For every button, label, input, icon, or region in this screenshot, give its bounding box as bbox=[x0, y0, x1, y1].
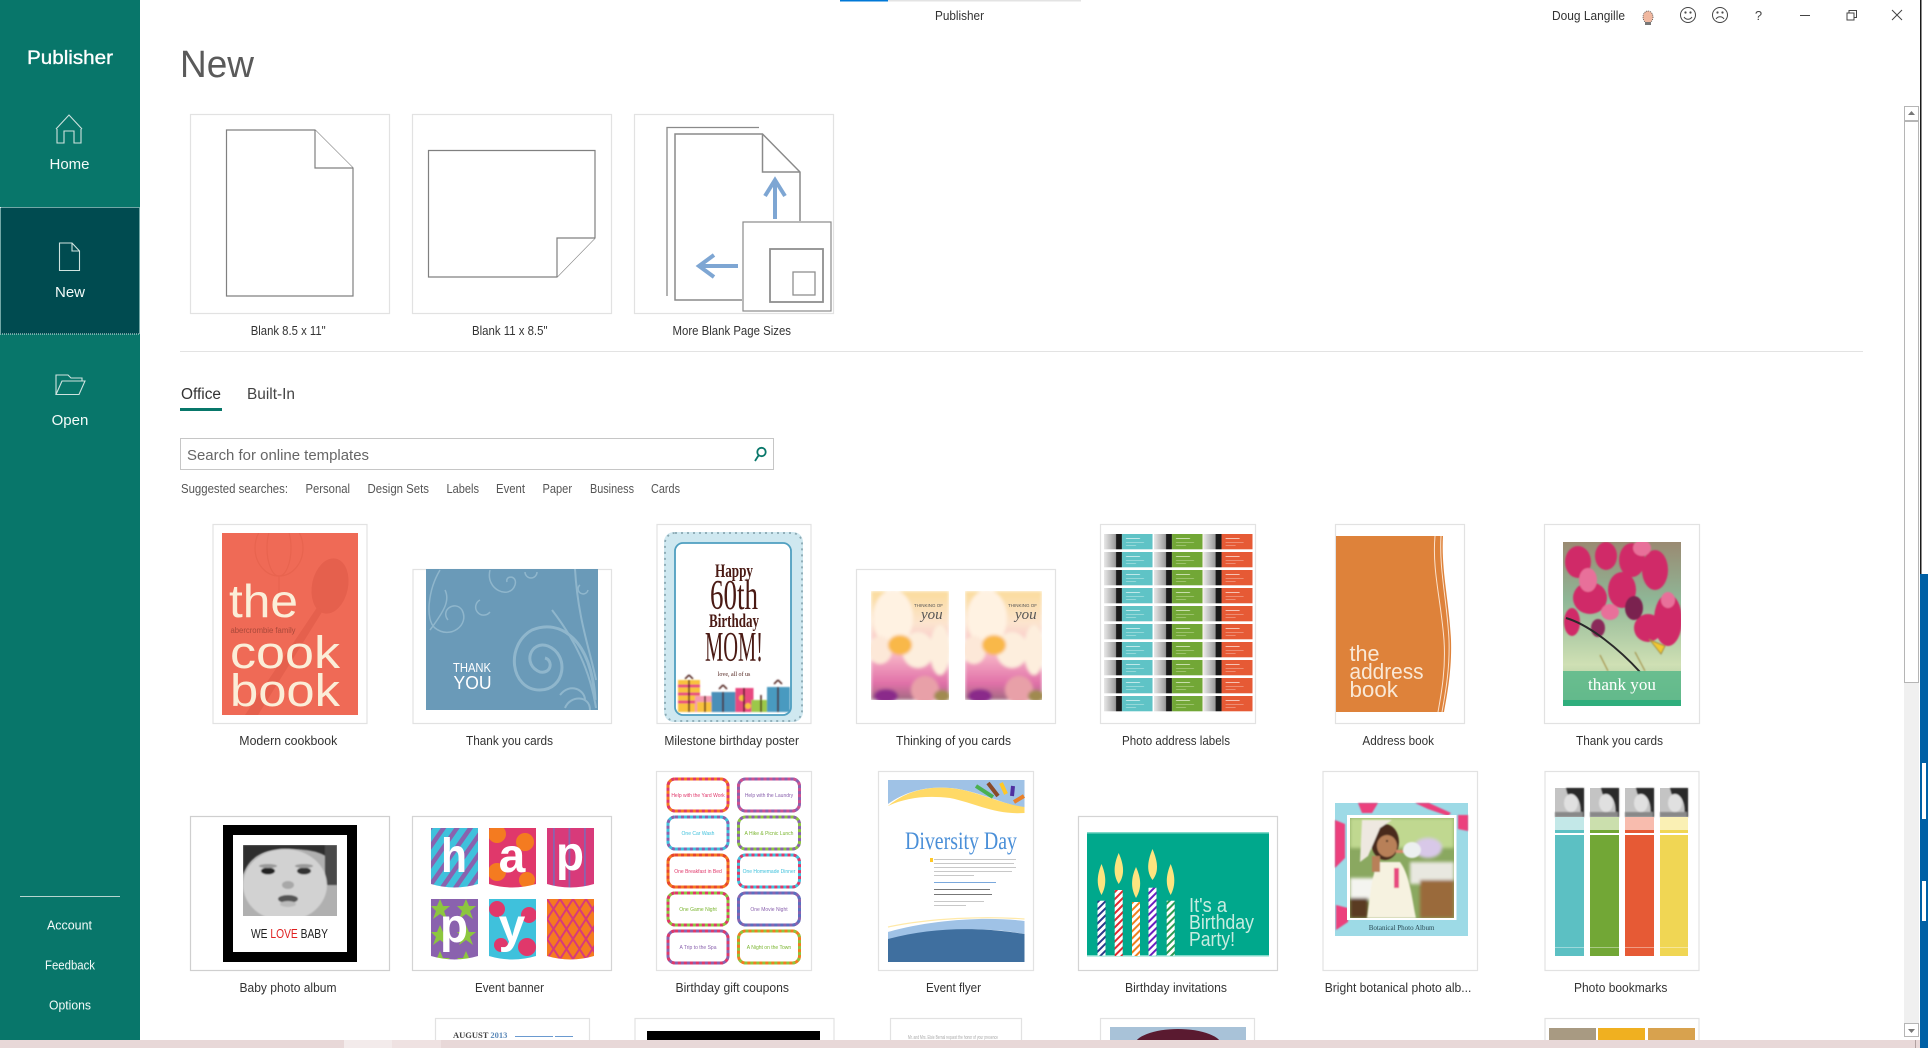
template: Milestone birthday poster bbox=[657, 524, 811, 748]
template: Address book: book bbox=[1350, 677, 1399, 702]
suggested searches: Paper bbox=[542, 482, 572, 496]
template: Modern cookbook: book bbox=[230, 665, 341, 716]
template: Photo address labels: Photo address labels bbox=[1122, 734, 1230, 748]
template: Birthday gift coupons: A Trip to the Spa bbox=[680, 945, 717, 951]
template: Thinking of you cards: you bbox=[919, 607, 943, 623]
suggested searches: Suggested searches: bbox=[181, 482, 288, 496]
suggested searches: Event bbox=[496, 482, 525, 496]
panel: more blank page sizes bbox=[634, 114, 834, 338]
template: Modern cookbook: abercrombie family bbox=[230, 626, 296, 635]
template: Modern cookbook: the bbox=[229, 575, 298, 627]
template: Thank you cards: YOU bbox=[454, 673, 492, 693]
template: Event flyer bbox=[878, 772, 1034, 995]
template: Bright botanical photo album bbox=[1323, 772, 1478, 995]
template: Birthday gift coupons: One Movie Night bbox=[750, 907, 788, 913]
template: Milestone birthday poster: love, all of us bbox=[718, 671, 751, 678]
right screen edge bbox=[1920, 0, 1928, 1048]
template: Thank you cards floral bbox=[1544, 524, 1700, 748]
panel: blank template Blank 11 x 8.5 bbox=[412, 114, 612, 338]
template: Birthday invitations: It's a bbox=[1189, 895, 1228, 917]
template: Birthday gift coupons: One Car Wash bbox=[682, 831, 715, 837]
template: Birthday gift coupons: One Game Night bbox=[679, 907, 717, 913]
template: Milestone birthday poster: 60th bbox=[710, 573, 758, 619]
template: Birthday invitations: Birthday bbox=[1189, 912, 1254, 934]
template: Birthday gift coupons: One Breakfast in Bed bbox=[674, 869, 722, 875]
icon: arrow up bbox=[765, 180, 785, 219]
suggested searches: Personal bbox=[306, 482, 350, 496]
template: Birthday gift coupons: Birthday gift coupons bbox=[676, 981, 789, 995]
template: Milestone birthday poster: MOM! bbox=[705, 625, 763, 671]
nav item: New selected: New bbox=[55, 284, 85, 301]
tab: Office bbox=[180, 386, 222, 411]
icon: smile bbox=[1680, 8, 1696, 22]
tab: Office: Office bbox=[181, 386, 221, 403]
template: Birthday gift coupons bbox=[656, 772, 812, 995]
template: Event banner: p bbox=[440, 900, 468, 953]
template: Birthday gift coupons: One Homemade Dinner bbox=[743, 869, 796, 875]
panel: blank template Blank 8.5 x 11 bbox=[190, 114, 390, 338]
user name: Doug Langille bbox=[1552, 9, 1625, 23]
template: Baby photo album bbox=[190, 816, 390, 995]
panel: sidebar navigation bbox=[0, 0, 140, 1040]
partial templates: third row: Mr. and Mrs. Elsie Bernal request the honor of your presence bbox=[908, 1035, 998, 1041]
template: Event banner: h bbox=[441, 830, 467, 883]
nav item: Home bbox=[49, 115, 90, 173]
template: Thank you cards floral: Thank you cards bbox=[1576, 734, 1663, 748]
template: Bright botanical photo album: Botanical Photo Album bbox=[1369, 924, 1435, 932]
search box bbox=[180, 438, 774, 470]
template: Thinking of you cards bbox=[856, 570, 1056, 748]
icon: arrow left bbox=[699, 255, 738, 277]
taskbar strip bbox=[0, 1040, 1920, 1048]
template: Milestone birthday poster: Milestone birthday poster bbox=[664, 734, 799, 748]
template: Bright botanical photo album: Bright botanical photo alb... bbox=[1325, 981, 1471, 995]
partial templates: third row bbox=[436, 1018, 1699, 1048]
template: Address book: the bbox=[1350, 641, 1380, 666]
template: Thinking of you cards: you bbox=[1013, 607, 1037, 623]
panel: blank template Blank 11 x 8.5: Blank 11 x 8.5" bbox=[472, 324, 548, 338]
template: Modern cookbook bbox=[213, 520, 367, 748]
template: Baby photo album: WE LOVE BABY bbox=[251, 926, 328, 941]
panel: more blank page sizes: More Blank Page Sizes bbox=[672, 324, 791, 338]
template: Photo address labels bbox=[1100, 524, 1256, 748]
icon: frown bbox=[1712, 8, 1728, 22]
panel: blank template Blank 8.5 x 11: Blank 8.5 x 11" bbox=[251, 324, 326, 338]
template: Birthday invitations: Birthday invitations bbox=[1125, 981, 1227, 995]
template: Photo bookmarks: Photo bookmarks bbox=[1574, 981, 1667, 995]
template: Thank you cards bbox=[413, 569, 612, 748]
template: Birthday gift coupons: Help with the Laundry bbox=[745, 793, 794, 799]
template: Birthday gift coupons: A Night on the Town bbox=[747, 945, 791, 951]
panel: heading New: New bbox=[180, 44, 255, 86]
nav item: Home: Home bbox=[49, 156, 90, 173]
template: Birthday gift coupons: A Hike & Picnic Lunch bbox=[745, 831, 794, 837]
nav item: Open: Open bbox=[52, 412, 88, 429]
icon: help: ? bbox=[1755, 8, 1762, 23]
app name: Publisher bbox=[27, 47, 114, 69]
template: Birthday invitations bbox=[1078, 816, 1278, 995]
template: Modern cookbook: cook bbox=[230, 627, 341, 678]
icon: search bbox=[755, 448, 766, 461]
template: Milestone birthday poster: Birthday bbox=[709, 611, 759, 632]
suggested searches: Business bbox=[590, 482, 634, 496]
template: Thank you cards: Thank you cards bbox=[466, 734, 553, 748]
template: Address book: address bbox=[1350, 659, 1424, 684]
template: Thinking of you cards: Thinking of you cards bbox=[896, 734, 1011, 748]
suggested searches bbox=[181, 482, 680, 496]
nav item: Options: Options bbox=[49, 998, 91, 1012]
scrollbar bbox=[1904, 106, 1919, 1037]
search box: Search for online templates bbox=[187, 448, 369, 464]
template: Thank you cards floral: thank you bbox=[1588, 675, 1656, 694]
template: Event banner: y bbox=[499, 900, 526, 953]
suggested searches: Design Sets bbox=[368, 482, 429, 496]
tab: Built-In: Built-In bbox=[247, 386, 295, 403]
suggested searches: Labels bbox=[446, 482, 479, 496]
template: Photo bookmarks bbox=[1545, 772, 1699, 995]
template: Address book: Address book bbox=[1362, 734, 1435, 748]
template: Address book bbox=[1336, 524, 1464, 748]
template: Birthday gift coupons: Help with the Yard Work bbox=[671, 793, 725, 799]
template: Milestone birthday poster: Happy bbox=[715, 561, 753, 582]
template: Thank you cards: THANK bbox=[453, 660, 491, 675]
template: Event banner bbox=[412, 816, 612, 995]
template: Baby photo album: Baby photo album bbox=[240, 981, 336, 995]
template: Thinking of you cards: THINKING OF bbox=[1008, 603, 1037, 608]
template: Event flyer: Diversity Day bbox=[905, 828, 1017, 855]
template: Birthday invitations: Party! bbox=[1189, 929, 1235, 951]
icon: user avatar bbox=[1643, 11, 1653, 25]
template: Event banner: Event banner bbox=[475, 981, 544, 995]
template: Event banner: a bbox=[499, 830, 526, 883]
template: Thinking of you cards: THINKING OF bbox=[914, 603, 943, 608]
template: Event flyer: Event flyer bbox=[926, 981, 981, 995]
template: Modern cookbook: Modern cookbook bbox=[239, 734, 338, 748]
nav item: Account: Account bbox=[47, 918, 93, 932]
nav item: Feedback: Feedback bbox=[45, 958, 96, 972]
nav item: Open bbox=[52, 375, 88, 429]
icon: window controls bbox=[1800, 10, 1902, 20]
suggested searches: Cards bbox=[651, 482, 680, 496]
nav item: New selected bbox=[0, 208, 140, 334]
partial templates: third row: AUGUST 2013 bbox=[453, 1030, 507, 1040]
window title bar: Publisher bbox=[935, 9, 984, 23]
template: Event banner: p bbox=[556, 828, 584, 881]
